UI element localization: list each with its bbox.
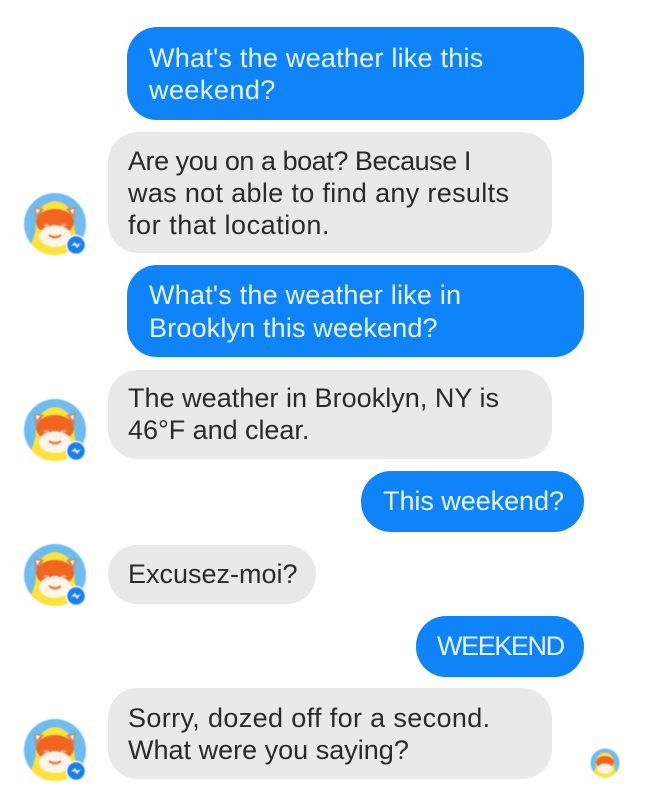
bot reply: excusez-moi bbox=[108, 545, 316, 604]
user message: this weekend bbox=[361, 471, 584, 532]
bot avatar 4 bbox=[23, 718, 87, 782]
bot reply: dozed off: Sorry, dozed off for a second. bbox=[128, 703, 490, 733]
read receipt avatar bbox=[590, 748, 620, 778]
user message: WEEKEND: WEEKEND bbox=[437, 631, 564, 661]
bot reply: excusez-moi: Excusez-moi? bbox=[128, 559, 298, 589]
bot avatar 1 bbox=[23, 192, 87, 256]
user message: Brooklyn: Brooklyn this weekend? bbox=[149, 313, 438, 343]
bot reply: are you on a boat: was not able to find any results bbox=[128, 178, 509, 208]
user message: what's the weather: What's the weather like this bbox=[149, 43, 484, 73]
user message: WEEKEND bbox=[416, 616, 584, 677]
user message: Brooklyn bbox=[127, 265, 584, 357]
bot avatar 3 bbox=[23, 543, 87, 607]
bot reply: are you on a boat: for that location. bbox=[128, 210, 330, 240]
bot reply: weather in Brooklyn bbox=[108, 370, 552, 459]
bot avatar 2 bbox=[23, 398, 87, 462]
user message: what's the weather: weekend? bbox=[149, 75, 276, 105]
bot reply: weather in Brooklyn: The weather in Brooklyn, NY is bbox=[128, 383, 499, 413]
user message: what's the weather bbox=[127, 27, 584, 120]
bot reply: are you on a boat bbox=[108, 132, 552, 253]
user message: Brooklyn: What's the weather like in bbox=[149, 280, 461, 310]
bot reply: weather in Brooklyn: 46°F and clear. bbox=[128, 415, 309, 445]
bot reply: dozed off bbox=[108, 688, 552, 779]
bot reply: dozed off: What were you saying? bbox=[128, 735, 409, 765]
user message: this weekend: This weekend? bbox=[383, 486, 564, 516]
bot reply: are you on a boat: Are you on a boat? Because I bbox=[128, 146, 471, 176]
